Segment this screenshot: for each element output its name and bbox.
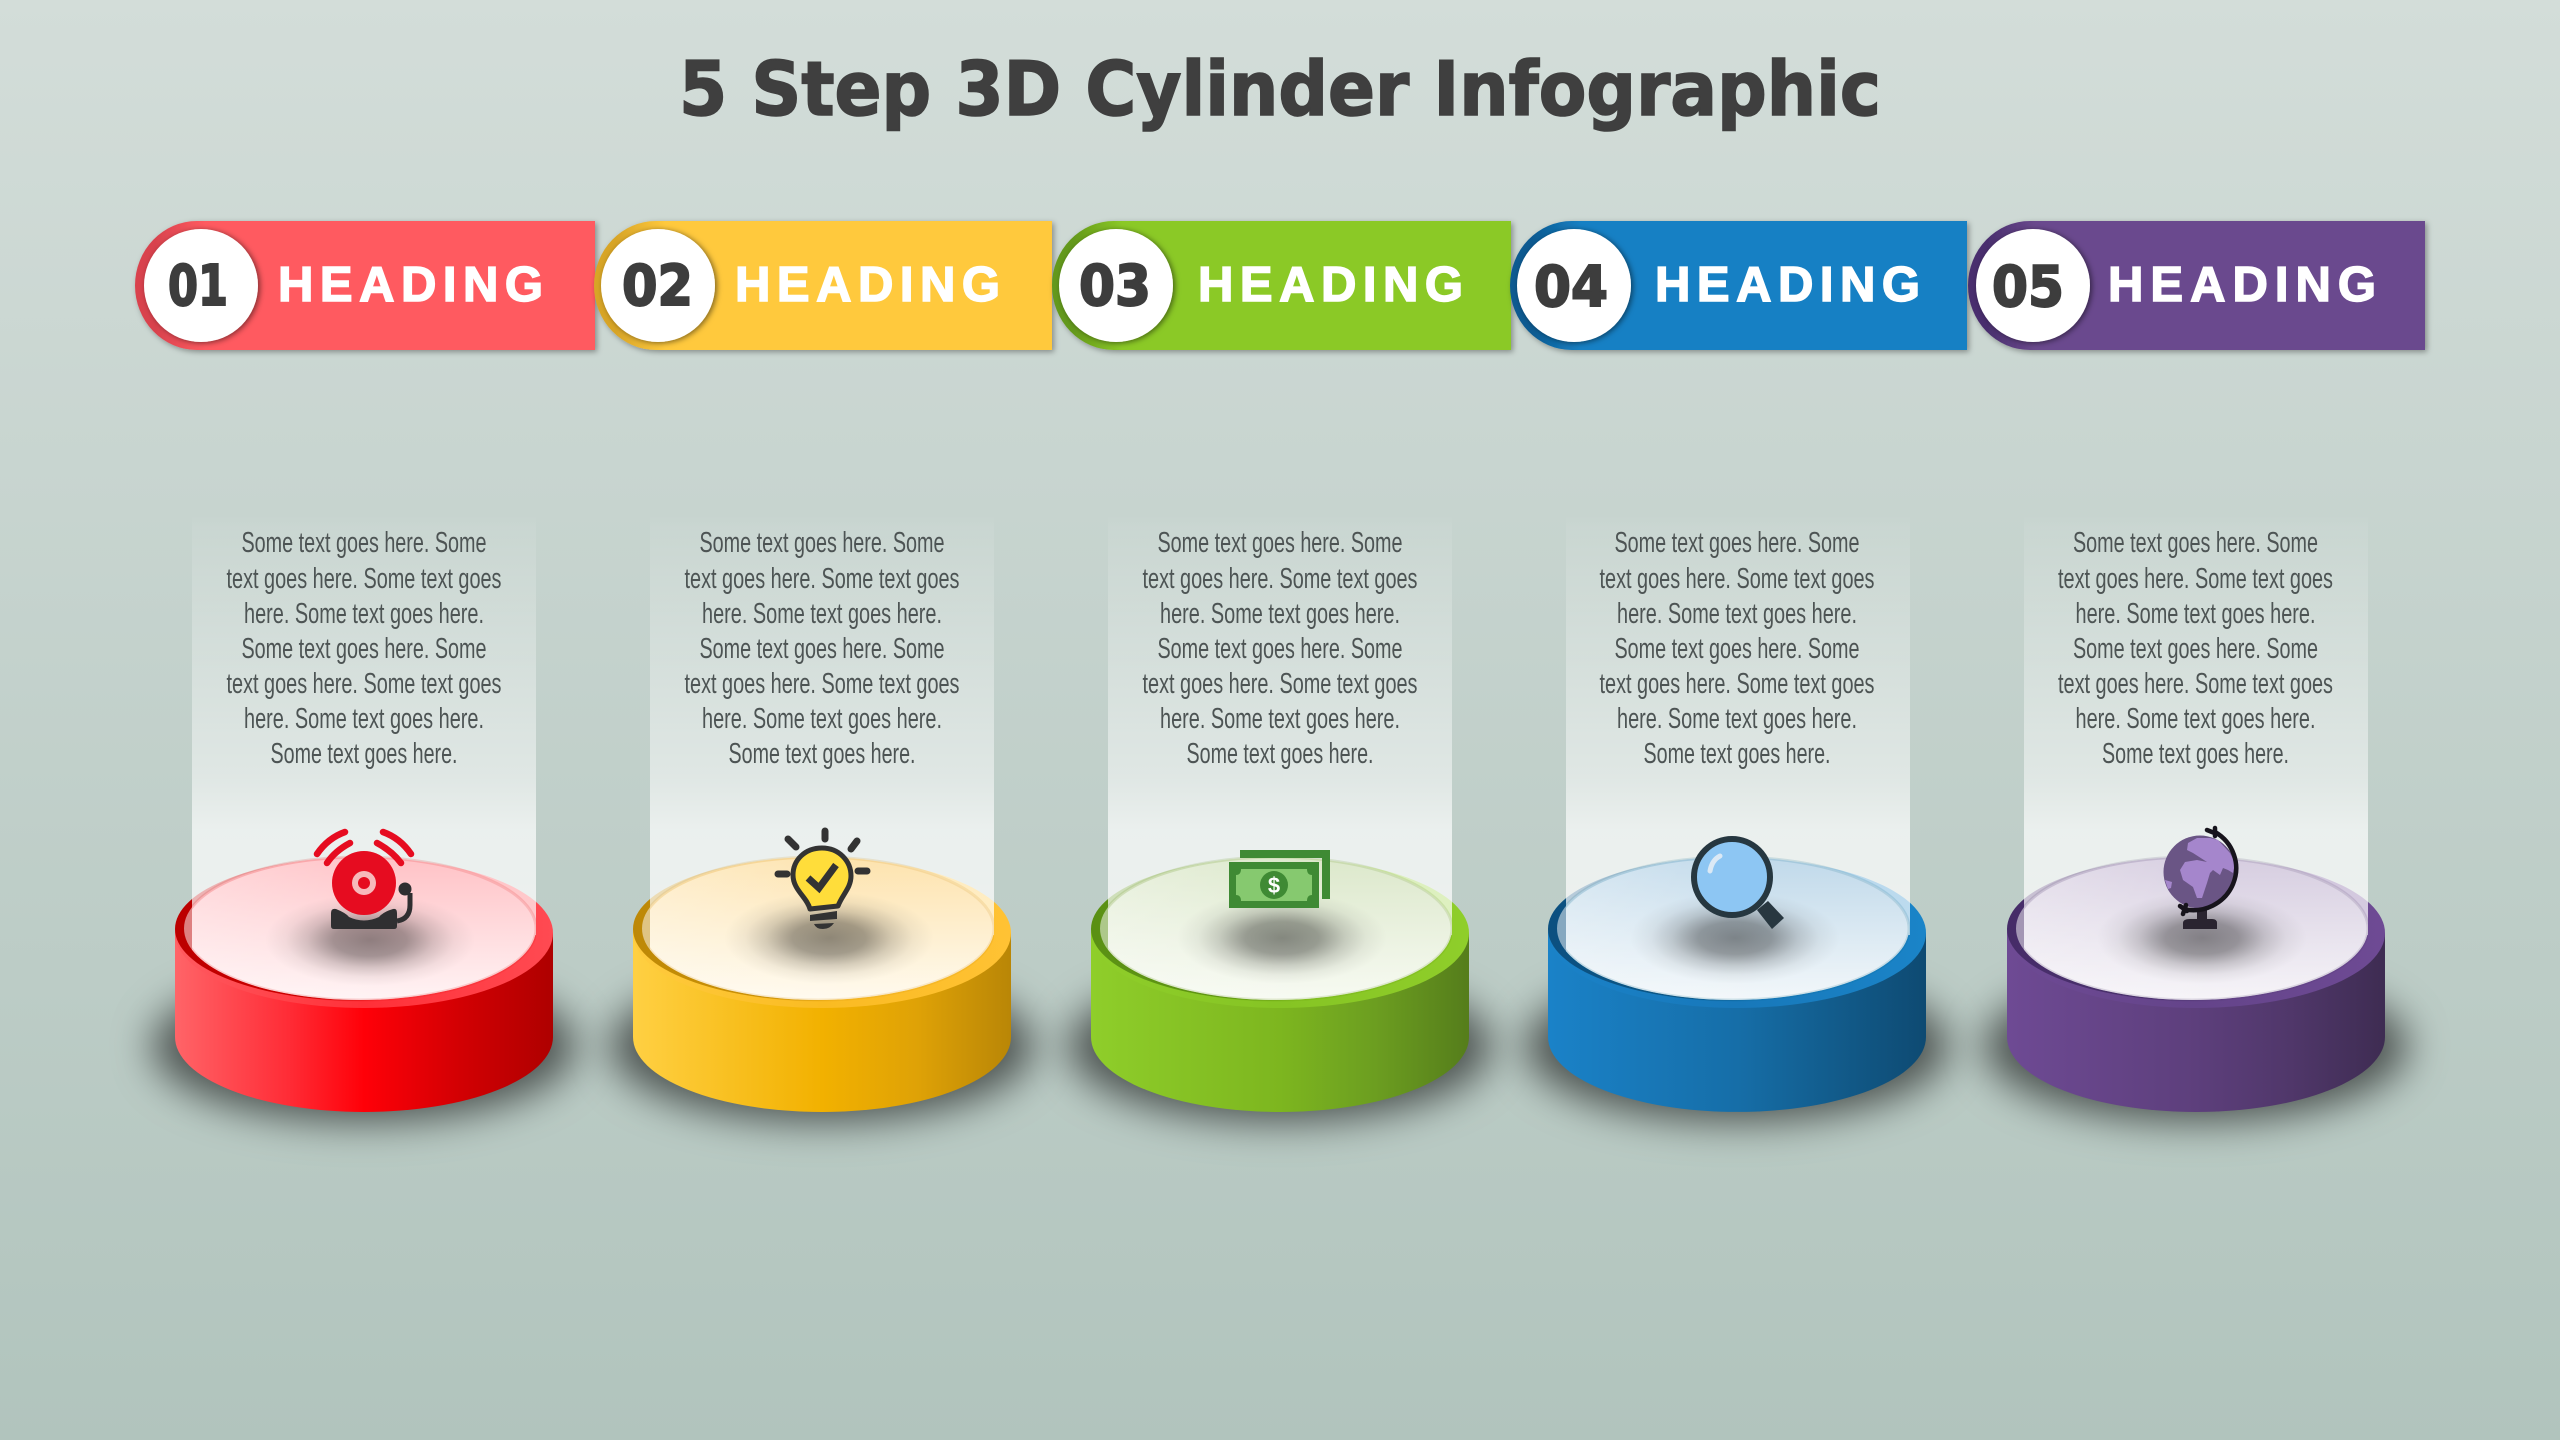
- text block 5: [2058, 527, 2333, 770]
- text block 5: text goes here. Some text goes: [2058, 563, 2333, 595]
- heading bar 02: [594, 221, 1052, 350]
- text block 5: here. Some text goes here.: [2076, 598, 2316, 630]
- text block 1: text goes here. Some text goes: [226, 668, 502, 700]
- text block 5: Some text goes here. Some: [2073, 633, 2318, 665]
- icon: globe on stand: [2164, 828, 2236, 929]
- icon shadow 2: [724, 892, 934, 984]
- cylinder 3 shadow: [1068, 970, 1492, 1122]
- heading bar 02: HEADING: [735, 258, 1000, 312]
- icon shadow 3: [1177, 892, 1387, 984]
- text column 2 backing: [650, 515, 994, 935]
- text block 5: Some text goes here.: [2102, 738, 2289, 770]
- cylinder 4 inner wall: [1548, 857, 1922, 1001]
- panel: step 1 cylinder and text: [152, 515, 576, 1122]
- text block 4: text goes here. Some text goes: [1600, 563, 1874, 595]
- heading bar 02: 02: [622, 254, 693, 319]
- heading bar 05: [1968, 221, 2425, 350]
- cylinder 2 inner wall: [633, 857, 1007, 1001]
- icon: light bulb with check: [778, 831, 867, 929]
- text block 2: [684, 527, 960, 770]
- cylinder 3 surface sheen: [1108, 868, 1190, 939]
- cylinder 2 body: [633, 933, 1011, 1112]
- icon: alarm bell: [317, 832, 412, 929]
- text block 3: here. Some text goes here.: [1160, 703, 1400, 735]
- icon shadow 1: [265, 894, 475, 986]
- panel: step 2 cylinder and text: [610, 515, 1034, 1122]
- heading bar 05: 05: [1992, 255, 2064, 320]
- cylinder 4 body: [1548, 933, 1926, 1112]
- text block 2: here. Some text goes here.: [702, 598, 942, 630]
- icon: banknotes: [1229, 850, 1330, 908]
- icon: magnifying glass: [1694, 839, 1784, 929]
- text column 3 backing: [1108, 515, 1452, 935]
- text block 3: [1142, 527, 1418, 770]
- heading bar 01: 01: [168, 254, 228, 319]
- cylinder 3 rim: [1091, 858, 1469, 1008]
- text block 1: text goes here. Some text goes: [226, 563, 502, 595]
- cylinder 2 top surface: [642, 857, 994, 1000]
- heading bar 05: HEADING: [2108, 258, 2376, 312]
- title: 5 Step 3D Cylinder Infographic: [679, 45, 1881, 133]
- text block 1: here. Some text goes here.: [244, 598, 484, 630]
- cylinder 1 body: [175, 933, 553, 1112]
- icon: banknotes: $: [1268, 873, 1280, 898]
- text block 3: Some text goes here.: [1186, 738, 1374, 770]
- cylinder 1 inner wall: [175, 857, 549, 1001]
- heading bar 01: [135, 221, 595, 350]
- cylinder 3 body: [1091, 933, 1469, 1112]
- text block 4: Some text goes here.: [1644, 738, 1830, 770]
- cylinder 1 top surface: [184, 857, 536, 1000]
- cylinder 2 surface sheen: [650, 860, 778, 965]
- text block 3: here. Some text goes here.: [1160, 598, 1400, 630]
- cylinder 4 rim: [1548, 858, 1926, 1008]
- text block 4: here. Some text goes here.: [1617, 598, 1857, 630]
- cylinder 1 rim: [175, 858, 553, 1008]
- text block 3: text goes here. Some text goes: [1142, 563, 1418, 595]
- text column 5 backing: [2024, 515, 2368, 935]
- text block 4: Some text goes here. Some: [1614, 633, 1860, 665]
- icon shadow 4: [1630, 892, 1840, 984]
- text block 4: [1600, 527, 1874, 770]
- heading bar 03: [1052, 221, 1511, 350]
- heading bar 03: HEADING: [1198, 258, 1463, 312]
- cylinder 4 shadow: [1525, 970, 1949, 1122]
- cylinder 1 surface sheen: [192, 864, 294, 948]
- text block 2: text goes here. Some text goes: [684, 668, 960, 700]
- cylinder 5 surface sheen: [2024, 870, 2100, 932]
- cylinder 1 glass disc edge: [184, 857, 536, 1000]
- cylinder 5 top surface: [2016, 857, 2368, 1000]
- cylinder 4 top surface: [1557, 857, 1909, 1000]
- cylinder 5 body: [2007, 933, 2385, 1112]
- cylinder 5 inner wall: [2007, 857, 2381, 1001]
- icon shadow 5: [2097, 892, 2307, 984]
- cylinder 1 shadow: [152, 970, 576, 1122]
- text block 2: Some text goes here. Some: [700, 527, 944, 559]
- text block 2: Some text goes here.: [728, 738, 916, 770]
- text block 4: text goes here. Some text goes: [1600, 668, 1874, 700]
- cylinder 4 glass disc edge: [1557, 857, 1909, 1000]
- text block 2: text goes here. Some text goes: [684, 563, 960, 595]
- panel: step 4 cylinder and text: [1525, 515, 1949, 1122]
- cylinder 4 surface sheen: [1566, 864, 1670, 952]
- heading bar 04: HEADING: [1655, 258, 1920, 312]
- text block 5: text goes here. Some text goes: [2058, 668, 2333, 700]
- heading bar 04: [1510, 221, 1967, 350]
- text block 1: [226, 527, 502, 770]
- text block 1: Some text goes here. Some: [242, 527, 486, 559]
- text block 5: Some text goes here. Some: [2073, 527, 2318, 559]
- text column 1 backing: [192, 515, 536, 935]
- text block 1: Some text goes here.: [270, 738, 458, 770]
- text block 5: here. Some text goes here.: [2076, 703, 2316, 735]
- text block 2: here. Some text goes here.: [702, 703, 942, 735]
- heading bar 03: 03: [1079, 254, 1151, 319]
- cylinder 3 top surface: [1100, 857, 1452, 1000]
- cylinder 2 rim: [633, 858, 1011, 1008]
- text block 3: text goes here. Some text goes: [1142, 668, 1418, 700]
- text block 3: Some text goes here. Some: [1158, 633, 1402, 665]
- heading bar 01: HEADING: [278, 258, 543, 312]
- text block 1: here. Some text goes here.: [244, 703, 484, 735]
- cylinder 2 glass disc edge: [642, 857, 994, 1000]
- cylinder 3 glass disc edge: [1100, 857, 1452, 1000]
- text block 2: Some text goes here. Some: [700, 633, 944, 665]
- panel: step 5 cylinder and text: [1984, 515, 2408, 1122]
- text block 3: Some text goes here. Some: [1158, 527, 1402, 559]
- heading bar 04: 04: [1534, 255, 1608, 320]
- cylinder 5 shadow: [1984, 970, 2408, 1122]
- text column 4 backing: [1566, 515, 1910, 935]
- cylinder 5 rim: [2007, 858, 2385, 1008]
- cylinder 5 glass disc edge: [2016, 857, 2368, 1000]
- text block 1: Some text goes here. Some: [242, 633, 486, 665]
- text block 4: Some text goes here. Some: [1614, 527, 1860, 559]
- text block 4: here. Some text goes here.: [1617, 703, 1857, 735]
- panel: step 3 cylinder and text: [1068, 515, 1492, 1122]
- cylinder 2 shadow: [610, 970, 1034, 1122]
- cylinder 3 inner wall: [1091, 857, 1465, 1001]
